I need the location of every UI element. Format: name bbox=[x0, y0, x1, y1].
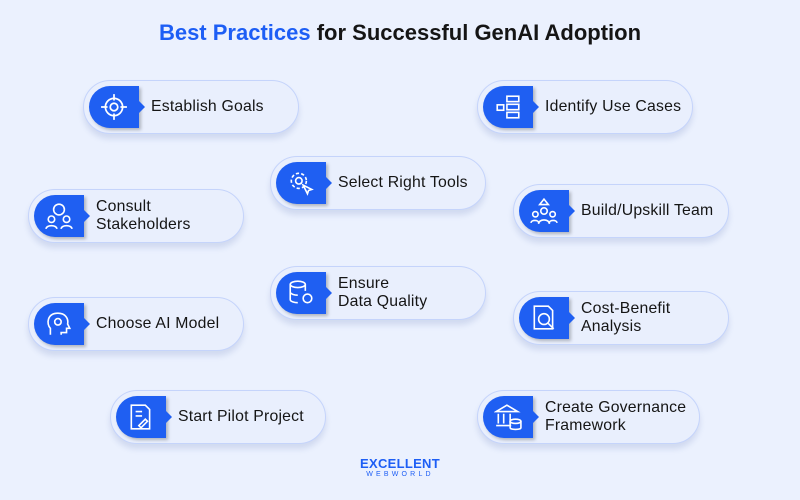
pill: identify use cases bbox=[477, 80, 693, 134]
pill: identify use cases: Identify Use Cases bbox=[545, 98, 681, 115]
pill: establish goals bbox=[83, 80, 299, 134]
logo: WEBWORLD bbox=[366, 471, 434, 478]
pill: select right tools: Select Right Tools bbox=[338, 174, 468, 191]
pill: cost benefit analysis: Cost-Benefit bbox=[581, 300, 670, 317]
pill: build upskill team: Build/Upskill Team bbox=[581, 202, 713, 219]
pill: build upskill team bbox=[513, 184, 729, 238]
pill: cost benefit analysis bbox=[513, 291, 729, 345]
logo: EXCELLENT bbox=[360, 456, 440, 471]
pill: ensure data quality bbox=[270, 266, 486, 320]
pill: ensure data quality: Ensure bbox=[338, 275, 389, 292]
logo bbox=[360, 456, 440, 478]
pill: create governance framework: Create Governance bbox=[545, 399, 686, 416]
pill: start pilot project: Start Pilot Project bbox=[178, 408, 304, 425]
pill: choose ai model: Choose AI Model bbox=[96, 315, 219, 332]
pill: create governance framework: Framework bbox=[545, 417, 626, 434]
pill: cost benefit analysis: Analysis bbox=[581, 318, 641, 335]
pill: create governance framework bbox=[477, 390, 700, 444]
title: Best Practices for Successful GenAI Adoption bbox=[159, 20, 641, 45]
pill: choose ai model bbox=[28, 297, 244, 351]
pill: select right tools bbox=[270, 156, 486, 210]
pill: establish goals: Establish Goals bbox=[151, 98, 264, 115]
pill: consult stakeholders: Stakeholders bbox=[96, 216, 191, 233]
pill: consult stakeholders: Consult bbox=[96, 198, 151, 215]
pill: consult stakeholders bbox=[28, 189, 244, 243]
pill: start pilot project bbox=[110, 390, 326, 444]
pill: ensure data quality: Data Quality bbox=[338, 293, 427, 310]
